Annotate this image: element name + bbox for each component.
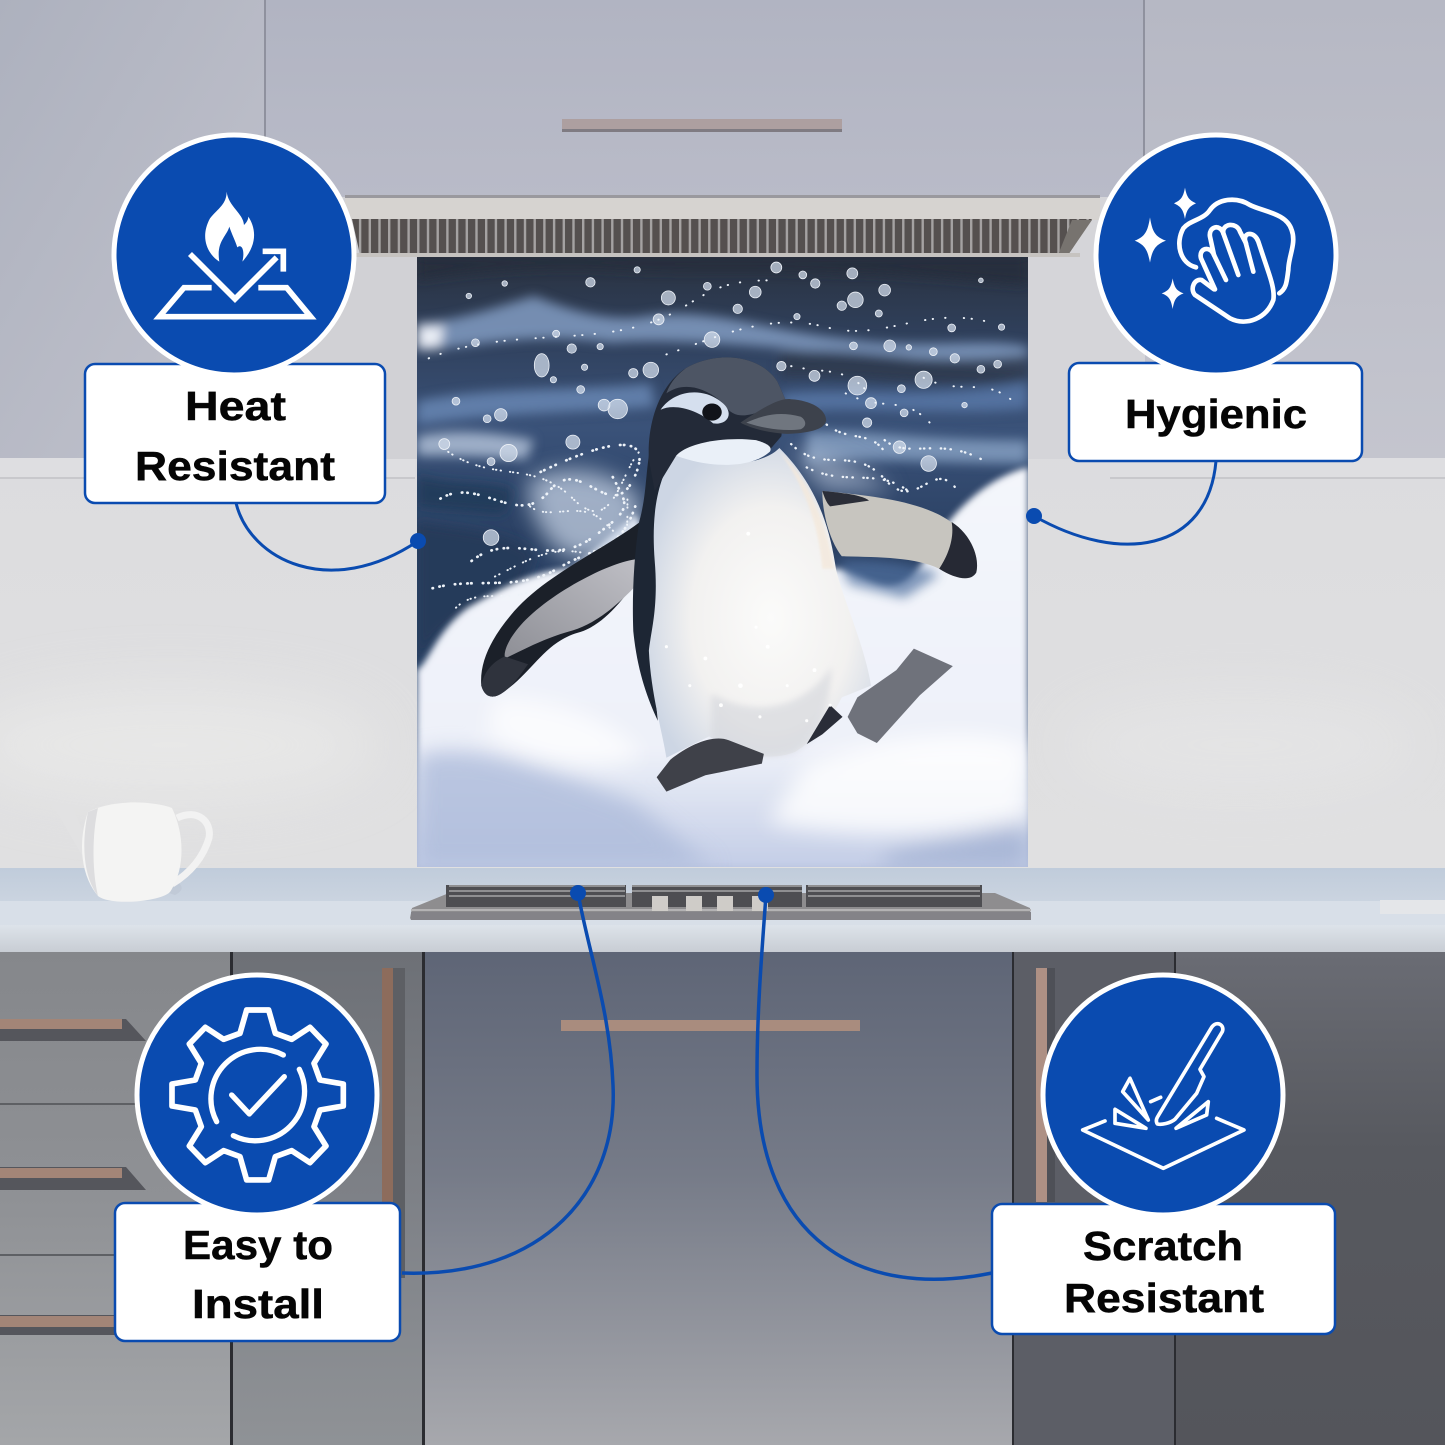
heading: heat resistant: Resistant xyxy=(135,443,335,489)
dark side strip xyxy=(632,456,663,721)
icon: flame over surface xyxy=(159,192,311,317)
right foot xyxy=(848,649,953,743)
foam specks on body xyxy=(665,532,832,722)
icon: knife scratching surface xyxy=(1083,1024,1244,1168)
label box: scratch resistant xyxy=(992,1204,1335,1334)
snow foam xyxy=(417,467,1028,868)
left foot xyxy=(657,739,764,792)
penguin body xyxy=(649,448,871,758)
splash clouds xyxy=(417,448,1028,868)
spray droplets xyxy=(439,262,1005,545)
badge: heat resistant xyxy=(114,135,354,375)
countertop xyxy=(0,868,1445,952)
warm chest tint xyxy=(783,456,834,569)
left flipper xyxy=(481,522,645,697)
waves xyxy=(417,257,1028,666)
heading: hygienic: Hygienic xyxy=(1125,391,1307,437)
connector: easy to install xyxy=(402,885,613,1273)
connector: hygienic xyxy=(1026,461,1216,544)
heading: easy to install: Install xyxy=(192,1281,324,1327)
range hood xyxy=(345,195,1100,257)
icon: gear with check xyxy=(172,1010,343,1180)
icon: wiping hand with sparkles xyxy=(1135,188,1293,322)
label box: heat resistant xyxy=(85,364,385,503)
right flipper xyxy=(822,491,977,578)
gap of water under right flipper xyxy=(838,560,939,598)
connector: scratch resistant xyxy=(757,887,992,1279)
heading: easy to install: Easy to xyxy=(183,1222,333,1268)
badge: easy to install xyxy=(137,975,377,1215)
badge: hygienic xyxy=(1096,135,1336,375)
heading: heat resistant: Heat xyxy=(185,383,286,429)
fine spray xyxy=(429,280,1017,608)
heading: scratch resistant: Resistant xyxy=(1064,1275,1264,1321)
splashback artwork: penguin in the waves xyxy=(417,257,1028,868)
dark thigh xyxy=(807,705,843,744)
base cabinets xyxy=(0,952,1445,1445)
callout: scratch resistant xyxy=(992,975,1335,1334)
upper cabinet handle xyxy=(562,119,842,132)
label box: easy to install xyxy=(115,1203,400,1341)
heading: scratch resistant: Scratch xyxy=(1083,1223,1243,1269)
connector: heat resistant xyxy=(236,503,426,570)
badge: scratch resistant xyxy=(1043,975,1283,1215)
penguin head xyxy=(649,357,826,491)
callout: heat resistant xyxy=(85,135,385,503)
callout: easy to install xyxy=(115,975,400,1341)
gas hob xyxy=(410,885,1031,920)
label box: hygienic xyxy=(1069,363,1362,461)
white jug xyxy=(50,802,209,902)
callout: hygienic xyxy=(1069,135,1362,461)
